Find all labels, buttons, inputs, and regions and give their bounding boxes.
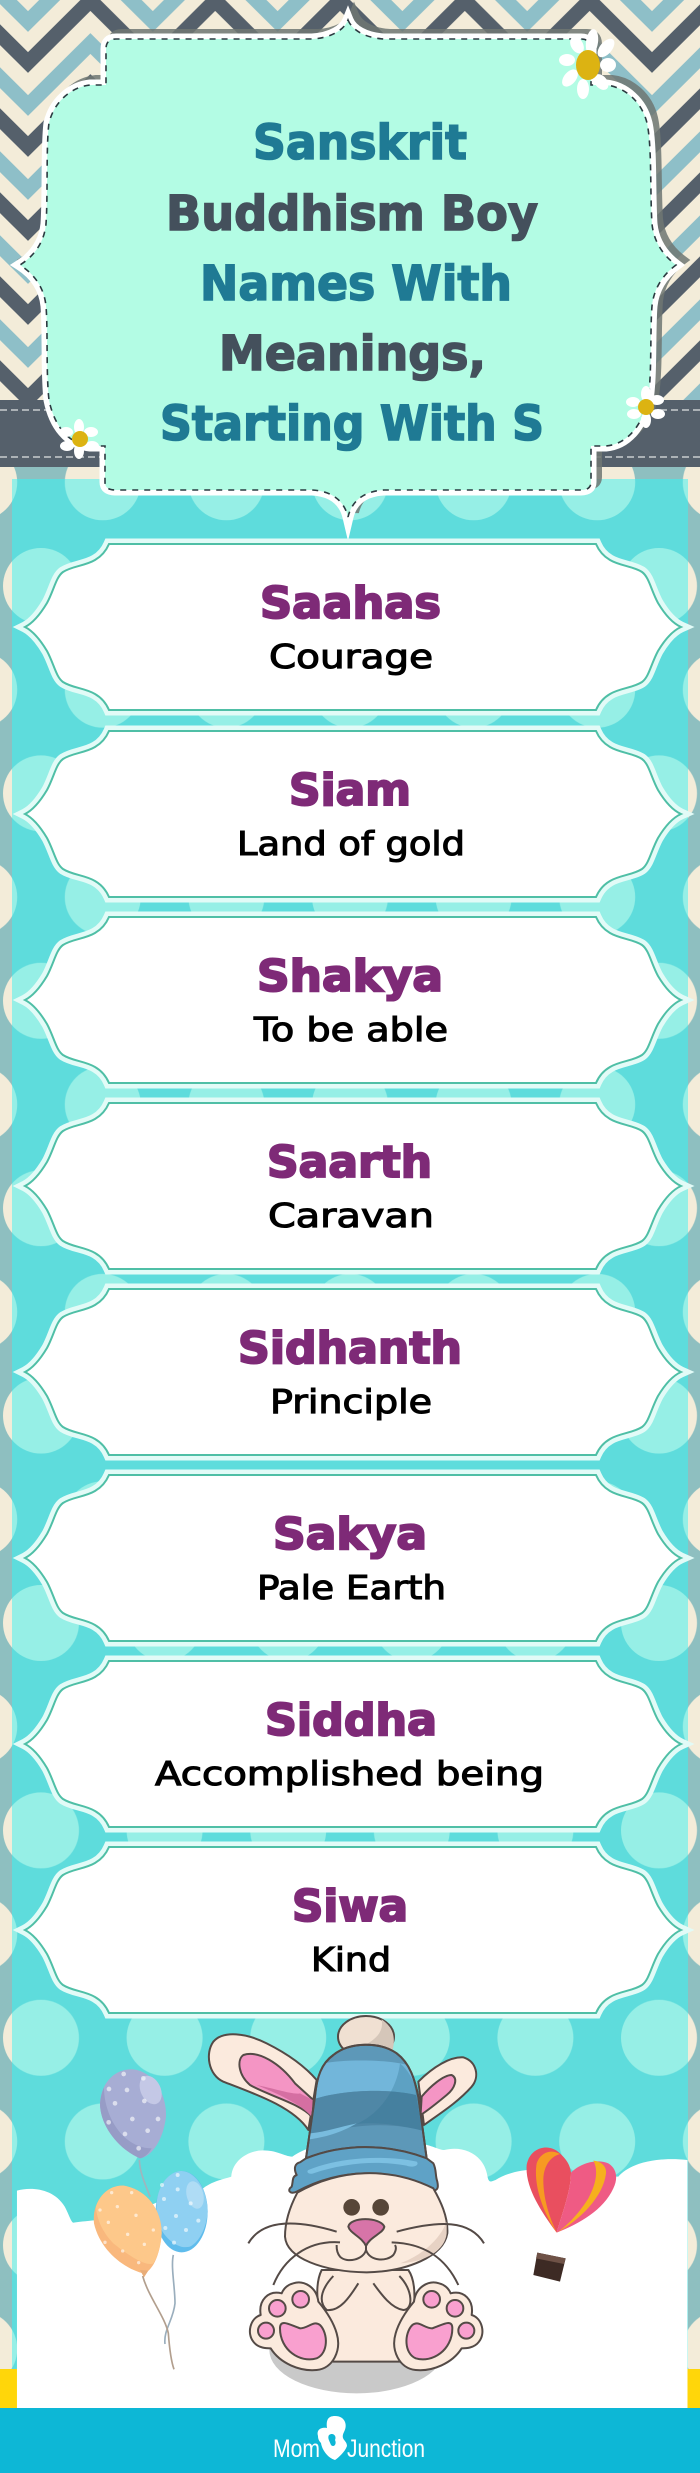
bunny right foot xyxy=(394,2282,482,2370)
flower: top right xyxy=(559,28,618,99)
logo mother and child mark xyxy=(318,2416,347,2460)
balloons xyxy=(94,2069,208,2369)
title plaque xyxy=(20,15,682,517)
card: Siam: Siam xyxy=(289,765,411,816)
card: Siam: Land of gold xyxy=(237,824,465,863)
bunny left foot xyxy=(250,2282,338,2370)
MomJunction logo: Mom xyxy=(273,2435,320,2463)
card: Siam xyxy=(25,731,681,897)
card: Siwa: Kind xyxy=(311,1940,391,1979)
card: Shakya: Shakya xyxy=(257,951,443,1002)
chevron header background xyxy=(0,0,700,400)
card: Sidhanth xyxy=(25,1289,681,1455)
card: Siddha: Accomplished being xyxy=(155,1754,544,1793)
MomJunction logo xyxy=(273,2416,425,2463)
title: Meanings, xyxy=(219,326,486,382)
card: Saahas xyxy=(25,544,681,710)
card: Saarth xyxy=(25,1103,681,1269)
polka dot side strips xyxy=(0,467,700,2408)
card: Sidhanth: Sidhanth xyxy=(238,1323,462,1374)
card: Siddha xyxy=(25,1661,681,1827)
card: Sakya: Pale Earth xyxy=(257,1568,446,1607)
card: Shakya xyxy=(25,917,681,1083)
card: Shakya: To be able xyxy=(253,1010,448,1049)
title: Starting With S xyxy=(160,396,544,452)
footer bar xyxy=(0,2408,700,2473)
bunny head xyxy=(248,2173,484,2285)
hat pompom xyxy=(338,2016,394,2057)
bunny body and arms xyxy=(317,2270,414,2362)
card: Saarth: Caravan xyxy=(268,1196,434,1235)
card: Saarth: Saarth xyxy=(267,1137,432,1188)
card: Sidhanth: Principle xyxy=(270,1382,432,1421)
bunny ears xyxy=(209,2034,476,2130)
striped hat xyxy=(289,2045,438,2193)
flower: lower left xyxy=(59,419,99,459)
hot air heart balloon xyxy=(527,2147,616,2282)
card: Sakya: Sakya xyxy=(273,1509,427,1560)
card: Saahas: Courage xyxy=(269,637,433,676)
white clouds xyxy=(17,2143,688,2408)
card: Siwa xyxy=(25,1847,681,2013)
bunny shadow xyxy=(269,2307,444,2393)
yellow corner tabs xyxy=(0,2369,700,2408)
card: Siwa: Siwa xyxy=(292,1881,408,1932)
MomJunction logo: Junction xyxy=(347,2435,425,2463)
dark ribbon band xyxy=(0,400,700,467)
flower: lower right xyxy=(626,386,665,428)
card: Sakya xyxy=(25,1475,681,1641)
title: Buddhism Boy xyxy=(166,186,538,242)
teal polka dot panel xyxy=(12,479,688,2408)
title: Sanskrit xyxy=(253,115,467,171)
card: Saahas: Saahas xyxy=(260,578,441,629)
card: Siddha: Siddha xyxy=(265,1695,437,1746)
bunny xyxy=(209,2016,484,2393)
title xyxy=(160,115,544,452)
title: Names With xyxy=(200,256,512,312)
